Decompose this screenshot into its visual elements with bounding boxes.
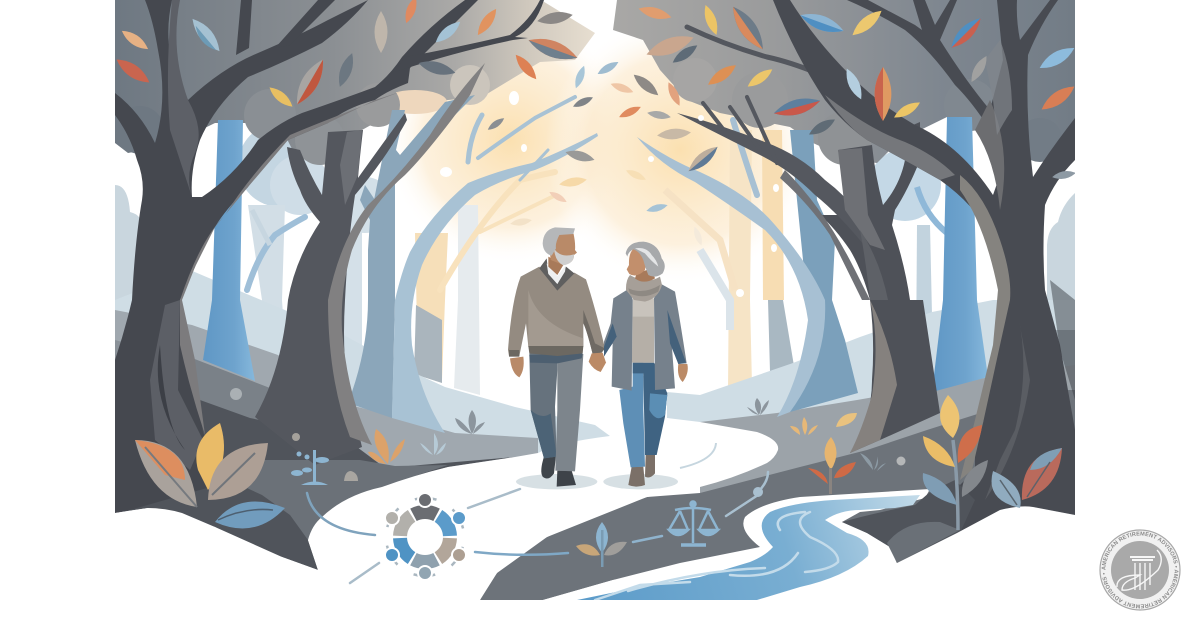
leaf: orange [135,440,197,507]
leaf: pale blue [992,471,1021,508]
right blue tree [932,117,988,392]
river water [577,495,920,600]
right foreground plant [923,395,1062,530]
leaf: gold top [940,395,959,438]
river white bank [543,489,930,600]
American Retirement Advisors seal logo [1099,529,1181,611]
man: neck and face [548,257,563,275]
woman: left leg [619,363,645,467]
seal text: AMERICAN RETIREMENT ADVISORS • AMERICAN RETIREMENT ADVISORS • [1102,532,1178,608]
man: sweater [508,267,605,356]
small sapling icon [291,450,329,485]
winding white path [308,418,778,600]
seal inner disc [1111,541,1169,599]
left foreground tree [115,0,544,513]
left foreground plant [135,423,285,528]
dark ground tip by the river [842,480,975,563]
woman [604,242,688,487]
leaf: gold [196,423,224,490]
community ring icon [385,493,466,580]
light sparkles [440,91,779,297]
man: beard [554,248,574,265]
small rocks [230,388,906,481]
leaf: blue [215,502,285,528]
sprout: orange [368,429,405,464]
woman: hair [626,242,665,277]
sprout: gray [747,398,769,415]
sprouts, left [368,410,485,464]
man: trousers [529,353,557,458]
connecting journey lines [307,472,768,583]
seal outer ring [1100,530,1180,610]
left blue-gray tree [348,95,598,433]
warm light glow [404,41,793,264]
pale mid ground, right [667,300,1075,422]
couple walking hand in hand [508,227,688,489]
woman: neck and face [635,268,655,282]
leaf: peach [836,413,857,427]
leaf: gray-orange [208,443,268,500]
ring nodes [385,493,466,580]
dark ground, right [480,400,1075,600]
man: left hand [510,357,524,377]
ring segments [390,502,460,572]
sprout: peach trio [790,417,818,435]
woman: scarf [626,275,662,302]
right white hill [897,506,1075,563]
man: shoes [541,455,556,479]
man: collar and shirt [539,258,574,291]
left blue tree [203,120,255,381]
sprout: pale blue [420,433,446,455]
illustration scene [113,0,1078,600]
left middle tree [255,63,485,465]
seal column emblem [1117,550,1161,590]
plant: gold and red [824,437,836,470]
canopy leaves, left [113,0,620,227]
dark ground, left [115,400,513,570]
river [543,489,930,600]
left canopy foliage [115,0,595,165]
balance scale icon [669,502,718,545]
left white hill [115,508,318,570]
right canopy foliage [613,0,1075,165]
woman: right hand [678,364,688,382]
man: hair [543,227,575,256]
leaf: blue left [923,473,957,505]
gray ground bands [115,310,1075,510]
woman: right leg [643,363,667,455]
sprout: gray-blue [860,453,886,471]
distant misty trees [115,123,1075,395]
leaf: gray right [962,460,988,497]
canopy leaves, right [609,2,1078,246]
right middle tree [677,27,940,453]
plant stem [953,440,958,530]
leaf: red [958,425,982,463]
right foreground tree [773,0,1075,563]
woman: sweater [632,298,654,363]
woman: boots [645,455,655,477]
pale mid ground, left [115,270,610,465]
woman: cardigan [604,283,687,391]
sprout: gray [455,410,485,434]
sprouts, right [747,398,886,494]
three-leaf growth icon [576,522,627,567]
right blue-gray tree [637,120,858,417]
leaf: gold left [923,436,955,467]
outer dashed ring [386,498,464,576]
leaf: red-blue [1022,448,1062,500]
clasped hands [589,353,606,372]
woman: waist [633,363,655,392]
ground shadows [516,474,597,489]
man [508,227,605,487]
